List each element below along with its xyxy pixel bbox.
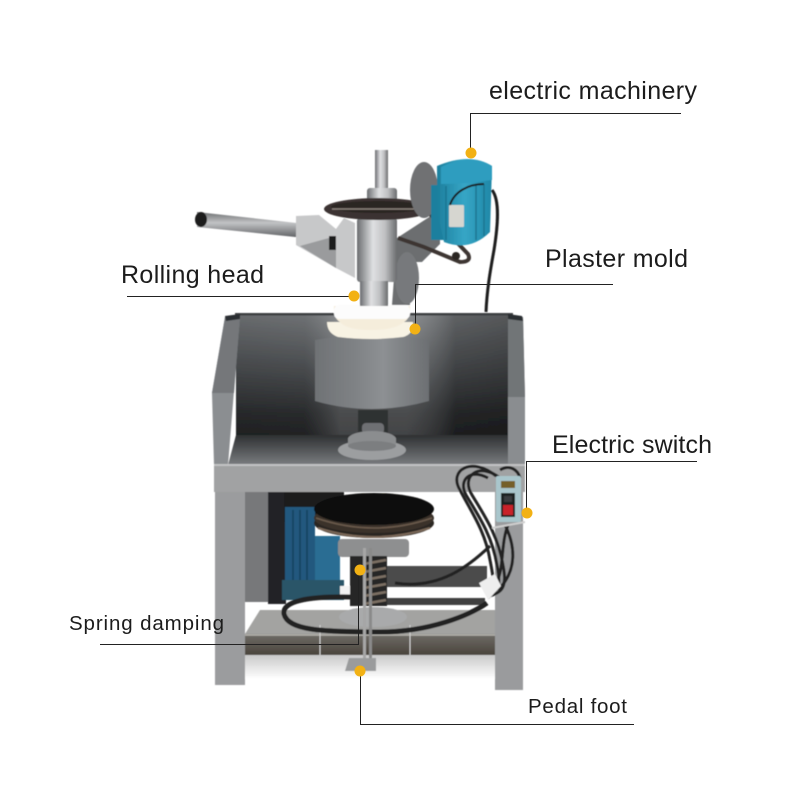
label: Spring damping: Spring damping xyxy=(69,612,224,635)
rear left post xyxy=(245,490,270,602)
label: Pedal foot: Pedal foot xyxy=(528,695,627,718)
pedal foot plate xyxy=(345,658,376,671)
rolling head assembly xyxy=(195,150,469,306)
handwheel xyxy=(324,198,432,220)
label: Rolling head xyxy=(121,261,360,302)
handle pipe xyxy=(197,212,315,239)
electric motor lower xyxy=(268,492,344,604)
floor shadow xyxy=(245,655,495,679)
back panel xyxy=(236,315,510,437)
machine stand xyxy=(215,490,523,690)
pulley wheel xyxy=(314,493,434,538)
label: Plaster mold xyxy=(410,245,688,334)
tub and work table xyxy=(212,313,525,492)
power cord xyxy=(486,190,498,312)
plaster mold xyxy=(327,305,413,339)
drum xyxy=(315,335,429,460)
switch strap xyxy=(492,522,525,528)
label: Rolling head: Rolling head xyxy=(121,261,264,289)
cable coil with switch xyxy=(395,466,520,598)
floor of tub xyxy=(228,435,510,465)
column xyxy=(357,218,397,282)
white plug xyxy=(479,574,501,600)
spring assembly xyxy=(338,539,409,666)
label: Spring damping xyxy=(69,564,366,644)
left side panel xyxy=(212,316,240,465)
front beam xyxy=(214,465,525,492)
pipe bracket xyxy=(296,215,355,278)
machine illustration xyxy=(195,150,525,690)
belt loop xyxy=(284,597,487,632)
right side panel xyxy=(508,316,525,465)
left leg xyxy=(215,490,245,685)
arm casting xyxy=(392,210,440,305)
top shaft xyxy=(375,150,388,192)
right leg xyxy=(495,490,523,690)
top rim xyxy=(235,313,513,316)
electric motor upper xyxy=(410,159,492,245)
label: Electric switch xyxy=(522,431,712,518)
label: Electric switch: Electric switch xyxy=(552,431,712,459)
electric switch box xyxy=(496,476,521,522)
label: electric machinery: electric machinery xyxy=(489,77,698,105)
crossbar xyxy=(340,566,487,605)
label: Plaster mold: Plaster mold xyxy=(545,245,688,273)
label: Pedal foot xyxy=(354,666,634,724)
label: electric machinery xyxy=(466,77,698,158)
lower tray xyxy=(245,610,495,655)
